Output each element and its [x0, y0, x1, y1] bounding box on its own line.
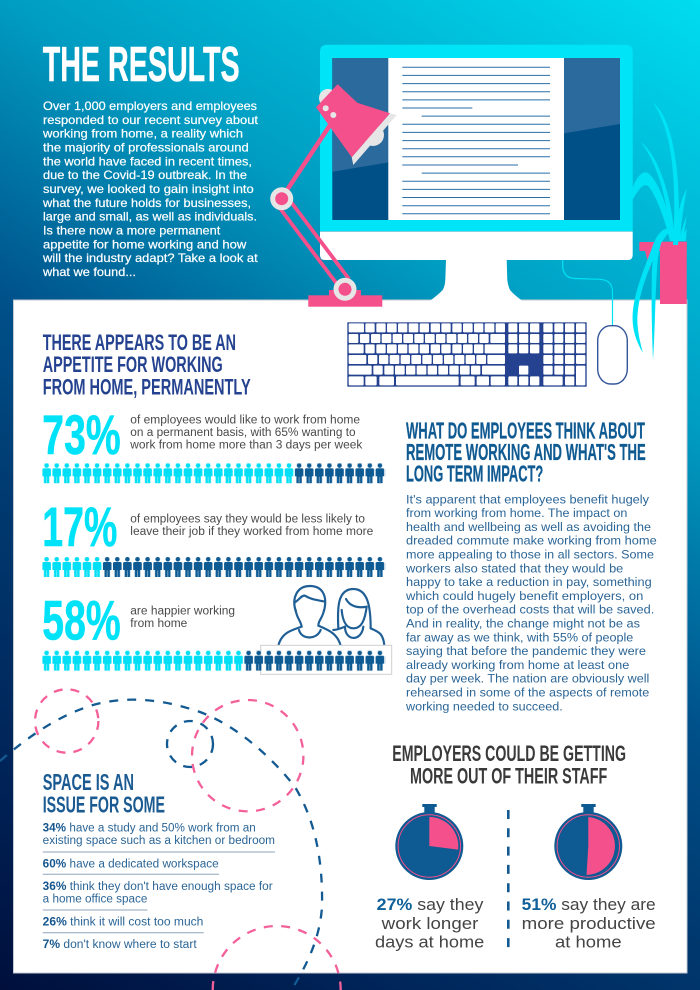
intro paragraph: Over 1,000 employers and employees: [43, 99, 257, 113]
paragraph: remote working impact: And in reality, the change might not be as: [406, 616, 640, 630]
intro paragraph: the world have faced in recent times,: [43, 154, 252, 168]
icon: potted plant: [632, 103, 687, 360]
list: space statistics: 7% don't know where to start: [43, 939, 198, 951]
stat: 58%: [42, 588, 235, 651]
stat: 73%: [42, 403, 363, 466]
intro paragraph: the majority of professionals around: [43, 140, 249, 154]
heading: appetite for working from home: APPETITE FOR WORKING: [43, 352, 223, 377]
paragraph: remote working impact: saying that before the pandemic they were: [406, 644, 646, 658]
dashed decorative circles and path: [0, 689, 341, 990]
paragraph: remote working impact: It's apparent that employees benefit hugely: [406, 492, 650, 506]
icon: stopwatch 27 percent: [395, 804, 463, 880]
intro paragraph: appetite for home working and how: [43, 237, 247, 251]
caption: 51 percent more productive: at home: [555, 933, 622, 951]
icon: desktop monitor: [320, 45, 633, 301]
heading: appetite for working from home: THERE APPEARS TO BE AN: [43, 330, 236, 355]
paragraph: remote working impact: dreaded commute make working from home: [406, 534, 657, 548]
icon: desk lamp: [273, 84, 397, 307]
heading: appetite for working from home: [43, 330, 251, 400]
list: space statistics: existing space such as a kitchen or bedroom: [43, 835, 275, 847]
heading: space is an issue: ISSUE FOR SOME: [43, 791, 165, 817]
intro paragraph: [42, 99, 259, 279]
heading: space is an issue: [43, 769, 165, 817]
caption: 27 percent work longer days: days at home: [375, 933, 484, 951]
paragraph: remote working impact: which could hugely benefit employers, on: [405, 589, 643, 603]
list: space statistics: 60% have a dedicated workspace: [43, 858, 219, 870]
stat: 17%: [42, 495, 373, 558]
list: space statistics: a home office space: [43, 893, 147, 905]
stat: 73%: of employees would like to work from home: [130, 414, 360, 426]
title: THE RESULTS: [43, 37, 240, 92]
caption: 27 percent work longer days: [375, 896, 484, 951]
paragraph: remote working impact: day per week. The nation are obviously well: [406, 672, 649, 686]
stat: 17%: of employees say they would be less likely to: [130, 513, 365, 525]
paragraph: remote working impact: rehearsed in some of the aspects of remote: [406, 686, 649, 700]
paragraph: remote working impact: far away as we think, with 55% of people: [406, 630, 633, 644]
intro paragraph: will the industry adapt? Take a look at: [42, 251, 258, 265]
caption: 51 percent more productive: [522, 896, 656, 951]
stat: 58%: from home: [130, 618, 187, 630]
intro paragraph: Is there now a more permanent: [43, 224, 221, 238]
paragraph: remote working impact: working needed to succeed.: [405, 699, 563, 713]
stat: 17%: leave their job if they worked from home more: [130, 526, 373, 538]
pictogram row: 17 percent: [42, 557, 386, 577]
stat: 73%: on a permanent basis, with 65% wanting to: [130, 427, 356, 439]
intro paragraph: survey, we looked to gain insight into: [43, 182, 254, 196]
heading: space is an issue: SPACE IS AN: [43, 769, 134, 795]
paragraph: remote working impact: top of the overhead costs that will be saved.: [406, 603, 654, 617]
intro paragraph: what we found...: [42, 265, 136, 279]
pictogram row: 58 percent: [42, 651, 386, 671]
heading: what do employees think: LONG TERM IMPACT?: [406, 461, 543, 487]
stat: 73%: work from home more than 3 days per week: [129, 440, 363, 452]
intro paragraph: what the future holds for businesses,: [42, 196, 251, 210]
paragraph: remote working impact: already working from home at least one: [406, 658, 629, 672]
paragraph: remote working impact: [405, 492, 657, 713]
icon: stopwatch 51 percent: [554, 804, 622, 880]
stat: 58%: 58%: [42, 588, 121, 651]
icon: two people: [278, 586, 384, 646]
box behind pictogram row: [261, 645, 392, 674]
list: space statistics: 36% think they don't have enough space for: [43, 881, 273, 893]
stat: 58%: are happier working: [130, 605, 235, 617]
white content panel: [14, 300, 687, 973]
list: space statistics: [43, 823, 275, 951]
icon: keyboard: [347, 322, 587, 387]
pictogram row: 73 percent: [42, 463, 386, 483]
intro paragraph: working from home, a reality which: [42, 127, 243, 141]
caption: 27 percent work longer days: 27% say they: [377, 896, 484, 914]
intro paragraph: responded to our recent survey about: [43, 113, 259, 127]
list: space statistics: 34% have a study and 50% work from an: [43, 823, 256, 835]
paragraph: remote working impact: health and wellbeing as well as avoiding the: [406, 520, 651, 534]
stat: 17%: 17%: [42, 495, 117, 558]
dashed divider: [507, 810, 510, 948]
stat: 73%: 73%: [42, 403, 121, 466]
caption: 51 percent more productive: 51% say they are: [522, 896, 656, 914]
heading: appetite for working from home: FROM HOME, PERMANENTLY: [43, 374, 251, 400]
caption: 51 percent more productive: more productive: [522, 915, 656, 933]
paragraph: remote working impact: more appealing to those in all sectors. Some: [406, 548, 654, 562]
heading: what do employees think: [406, 417, 646, 487]
icon: mouse with cable: [563, 260, 627, 384]
list: space statistics: 26% think it will cost too much: [43, 916, 203, 928]
heading: employers could be getting more: [392, 741, 626, 788]
paragraph: remote working impact: from working from home. The impact on: [406, 506, 627, 520]
intro paragraph: due to the Covid-19 outbreak. In the: [43, 168, 247, 182]
intro paragraph: large and small, as well as individuals.: [43, 210, 257, 224]
paragraph: remote working impact: happy to take a reduction in pay, something: [406, 575, 652, 589]
paragraph: remote working impact: workers also stated that they would be: [405, 561, 623, 575]
caption: 27 percent work longer days: work longer: [381, 915, 479, 933]
